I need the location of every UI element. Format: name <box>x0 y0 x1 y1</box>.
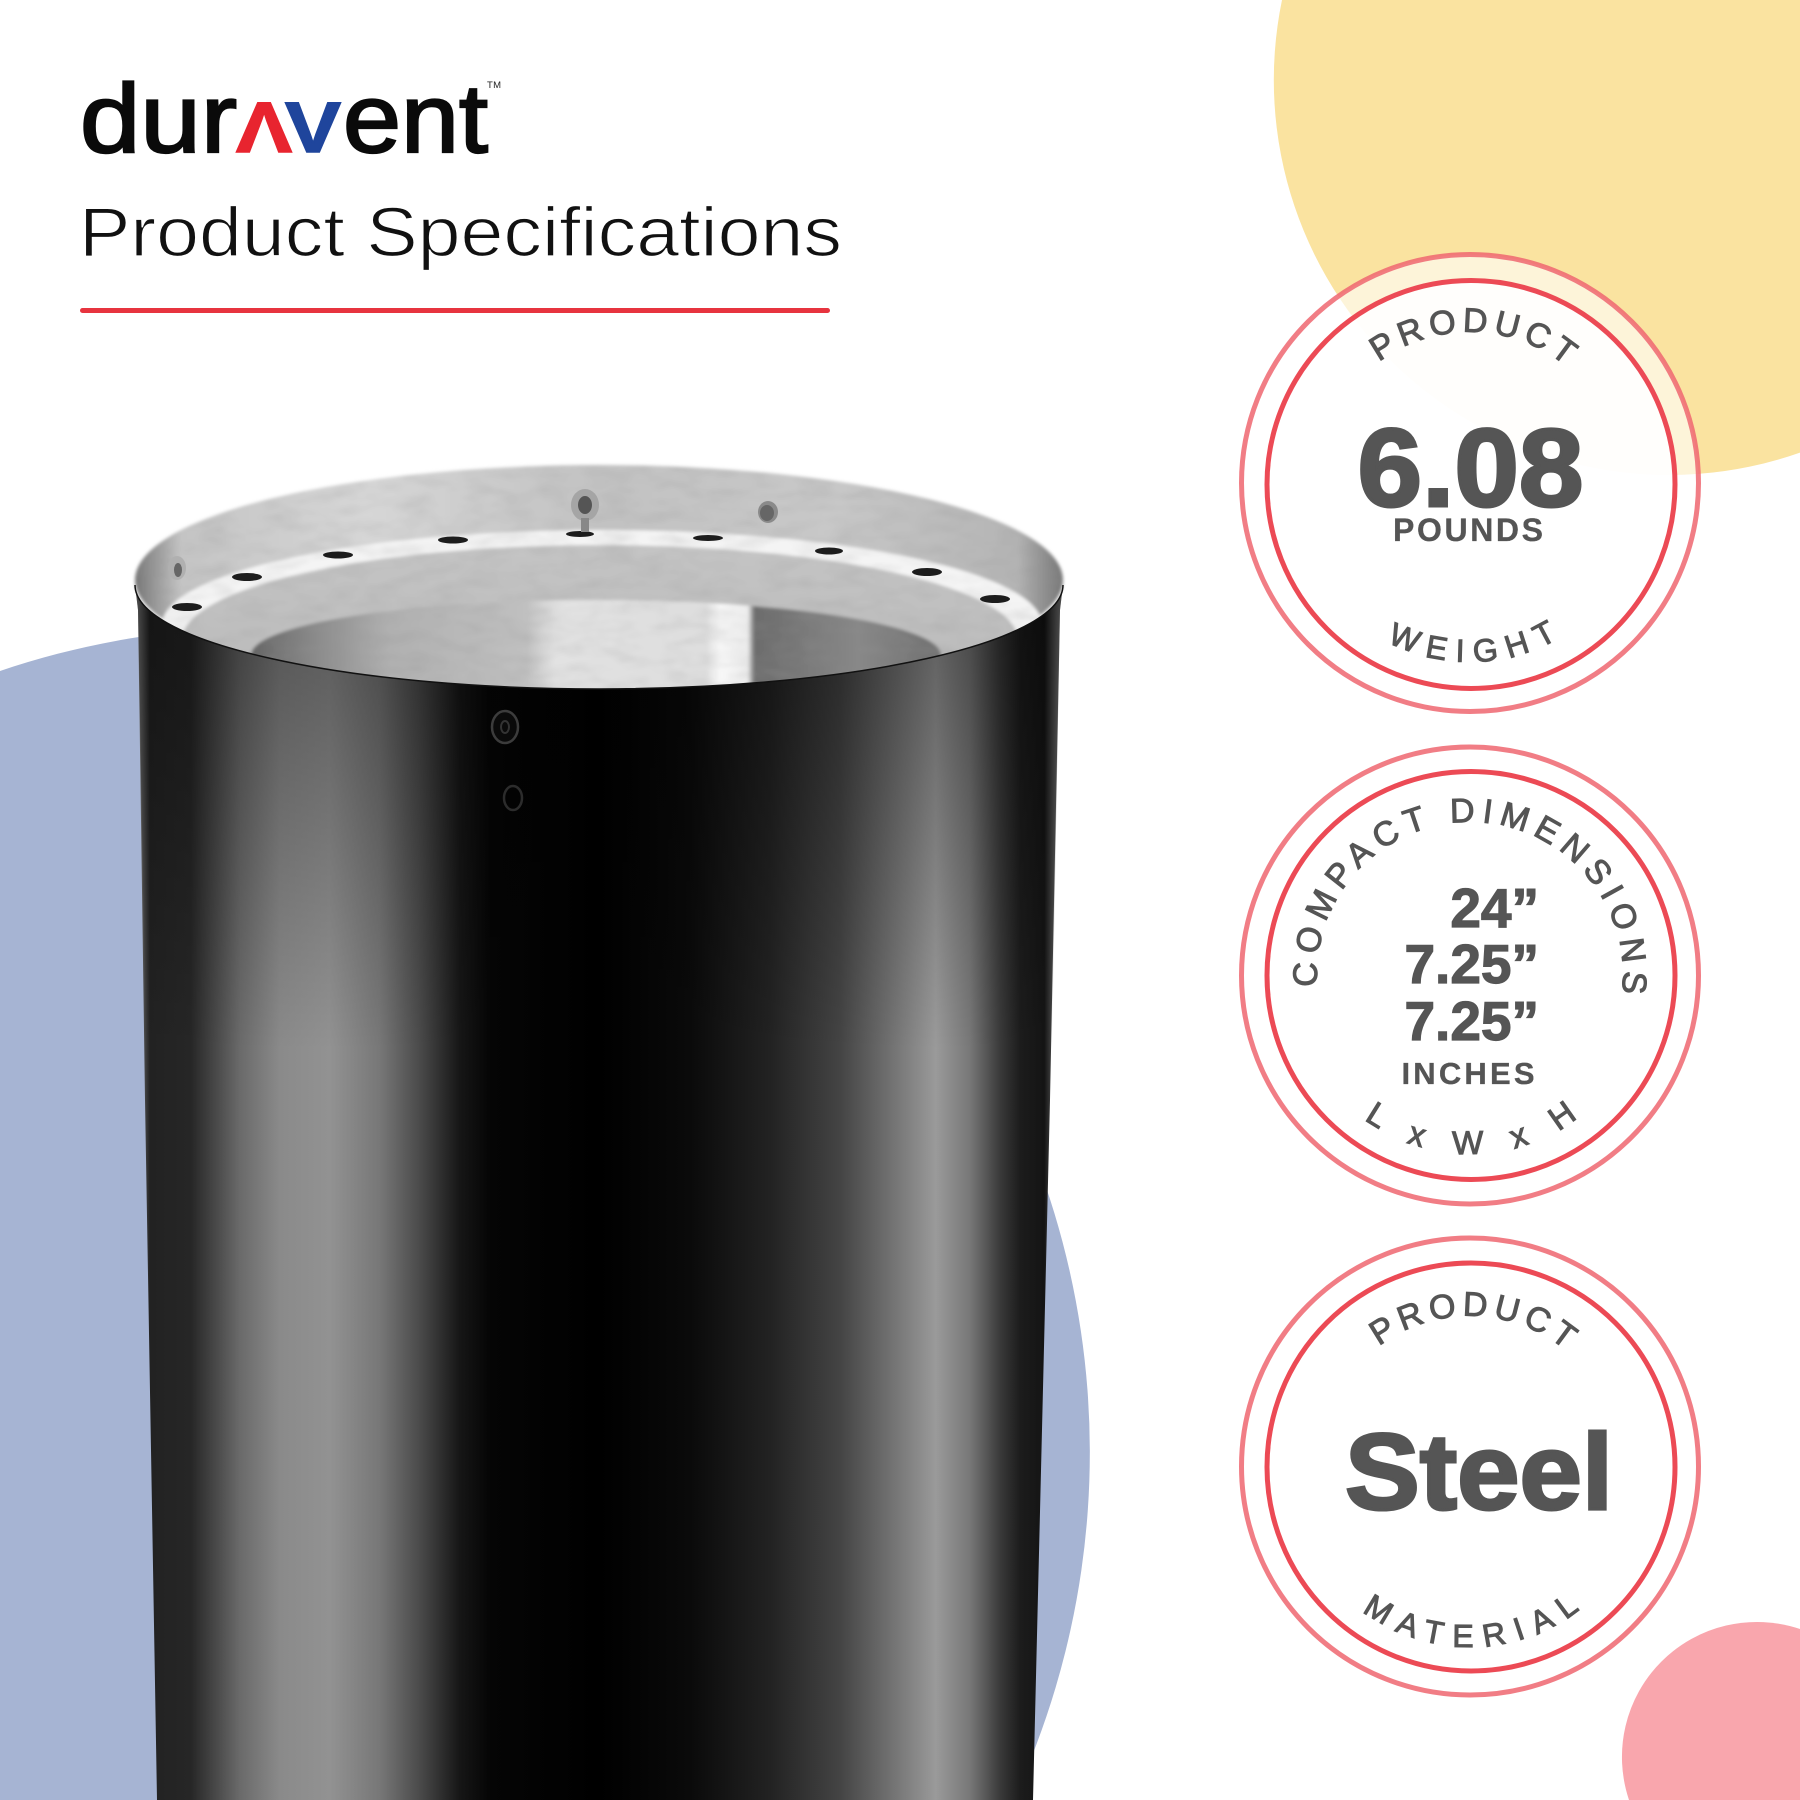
flange holes <box>172 531 1010 611</box>
badge: product material: MATERIAL <box>1363 1594 1580 1648</box>
badge: product weight: 6.08 <box>1358 407 1584 530</box>
badge: product weight <box>1239 252 1701 714</box>
pipe front rim line <box>135 585 1063 689</box>
heading: Product Specifications: Product Specifications <box>79 193 842 271</box>
pink background circle <box>1622 1622 1800 1800</box>
badge: compact dimensions <box>1239 744 1701 1206</box>
badge: product weight: POUNDS <box>1393 512 1543 548</box>
product photo: black stove pipe <box>135 465 1063 1800</box>
body top shading <box>135 585 1063 1050</box>
badge: compact dimensions: COMPACT DIMENSIONS <box>1292 798 1647 993</box>
logo: duravent: V <box>285 89 341 168</box>
body rivets <box>492 711 522 810</box>
badge: product weight: PRODUCT <box>1368 308 1580 362</box>
badge: compact dimensions: 7.25” <box>1404 990 1539 1052</box>
interior rivets <box>168 489 778 580</box>
badge: product material: PRODUCT <box>1368 1292 1580 1346</box>
logo: duravent: Λ <box>236 89 292 168</box>
badge: compact dimensions: 24” <box>1450 877 1539 939</box>
logo: duravent: dur <box>80 64 237 173</box>
badge: compact dimensions: L x W x H <box>1366 1100 1576 1155</box>
logo: duravent <box>80 64 501 173</box>
pipe body <box>135 585 1063 1800</box>
blue background circle <box>0 627 1090 1800</box>
logo: duravent: TM <box>487 80 501 91</box>
badge: compact dimensions: 7.25” <box>1404 933 1539 995</box>
yellow background circle <box>1274 0 1800 475</box>
badge: product material <box>1239 1236 1701 1698</box>
badge: product weight: WEIGHT <box>1392 619 1552 662</box>
red rule under heading <box>80 308 830 313</box>
badge: product material: Steel <box>1345 1411 1613 1532</box>
badge: compact dimensions: INCHES <box>1402 1056 1534 1091</box>
pipe interior <box>135 465 1063 735</box>
logo: duravent: ent <box>343 64 488 173</box>
